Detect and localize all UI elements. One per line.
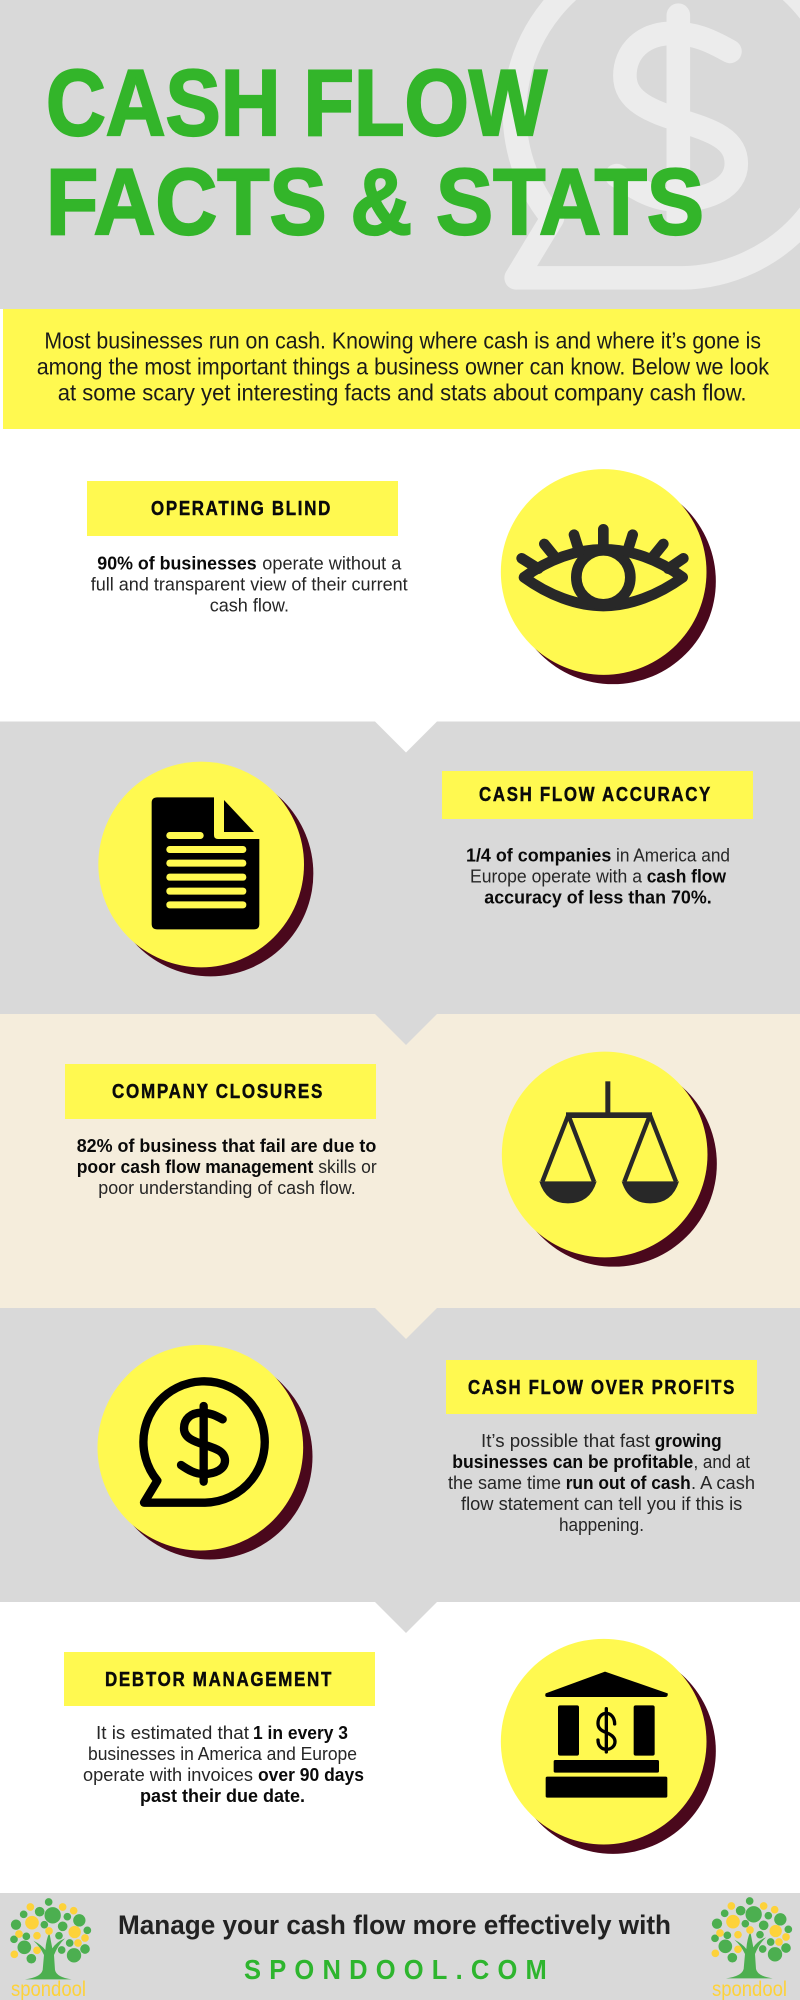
text block: cash flow accuracy: accuracy of less than 70%. [484, 887, 712, 908]
text block: cash flow over profits: run out of cash [566, 1472, 691, 1493]
arrow: gray notch into debtor management [375, 1602, 437, 1633]
heading: company closures: COMPANY CLOSURES [112, 1081, 324, 1103]
text block: debtor management: 1 in every 3 [253, 1722, 348, 1743]
text block: debtor management [83, 1722, 364, 1806]
text block: cash flow over profits: the same time [448, 1472, 561, 1493]
panel: company closures [65, 1052, 717, 1267]
arrow: white notch into cash flow accuracy [375, 722, 437, 752]
title: CASH FLOW [46, 50, 547, 155]
panel: cash flow over profits [97, 1345, 757, 1559]
text block: cash flow over profits: businesses can be profitable [452, 1451, 693, 1472]
icon: dollar speech bubble in yellow circle [97, 1345, 312, 1559]
panel: cash flow over profits background [0, 1308, 800, 1602]
title [46, 50, 704, 254]
text block: company closures: skills or [318, 1156, 377, 1177]
heading: debtor management [64, 1652, 375, 1706]
icon: eye in yellow circle [501, 469, 716, 684]
text block: debtor management: It is estimated that [96, 1722, 249, 1743]
heading: operating blind [87, 481, 398, 536]
panel: cash flow accuracy background [0, 722, 800, 1014]
text block: debtor management: over 90 days [258, 1764, 364, 1785]
text block: footer call to action: Manage your cash flow more effectively with [118, 1910, 671, 1940]
text block: debtor management: businesses in America and Europe [88, 1743, 357, 1764]
text block: cash flow accuracy: 1/4 of companies [466, 845, 611, 866]
icon: watermark speech bubble with dollar sign [515, 0, 800, 278]
heading: cash flow accuracy: CASH FLOW ACCURACY [479, 784, 712, 806]
panel: company closures background [0, 1014, 800, 1308]
text block: debtor management: operate with invoices [83, 1764, 253, 1785]
text block: cash flow over profits: , and at [694, 1451, 750, 1472]
arrow: gray notch into company closures [375, 1014, 437, 1045]
text block: operating blind: full and transparent view of their current [91, 573, 408, 594]
icon: balance scale in yellow circle [502, 1052, 717, 1267]
text block: operating blind: operate without a [262, 552, 402, 573]
text block: cash flow over profits: . A cash [691, 1472, 755, 1493]
text block: intro [37, 328, 769, 406]
text block: cash flow over profits: happening. [559, 1514, 644, 1535]
panel: intro band [3, 309, 800, 429]
text block: company closures: poor understanding of cash flow. [98, 1177, 356, 1198]
heading: debtor management: DEBTOR MANAGEMENT [105, 1669, 333, 1691]
text block: cash flow over profits: flow statement can tell you if this is [461, 1493, 742, 1514]
text block: cash flow over profits: growing [655, 1430, 722, 1451]
text block: cash flow over profits: It’s possible that fast [481, 1430, 650, 1451]
icon: spondool logo right [712, 1898, 792, 2000]
text block: operating blind: cash flow. [210, 594, 289, 615]
title: FACTS & STATS [46, 149, 704, 254]
text block: website: SPONDOOL.COM [244, 1954, 555, 1985]
heading: cash flow over profits: CASH FLOW OVER PROFITS [468, 1377, 736, 1399]
text block: operating blind: 90% of businesses [97, 552, 257, 573]
panel: operating blind [87, 469, 716, 684]
text block: cash flow accuracy: cash flow [647, 866, 727, 887]
heading: operating blind: OPERATING BLIND [151, 498, 332, 520]
panel: debtor management [64, 1639, 716, 1854]
text block: company closures [77, 1135, 377, 1198]
text block: cash flow accuracy: Europe operate with a [470, 866, 643, 887]
text block: cash flow over profits [448, 1430, 755, 1535]
text block: operating blind [91, 552, 408, 615]
panel: cash flow accuracy [98, 762, 753, 976]
icon: bank in yellow circle [501, 1639, 716, 1854]
heading: cash flow over profits [446, 1360, 757, 1414]
text block: debtor management: past their due date. [140, 1785, 305, 1806]
text block: company closures: 82% of business that fail are due to [77, 1135, 376, 1156]
heading: company closures [65, 1064, 376, 1119]
text block: cash flow accuracy: in America and [616, 845, 730, 866]
arrow: cream notch into cash flow over profits [375, 1308, 437, 1339]
text block: company closures: poor cash flow management [77, 1156, 313, 1177]
icon: document in yellow circle [98, 762, 313, 976]
panel: footer [0, 1893, 800, 2000]
heading: cash flow accuracy [442, 771, 753, 819]
text block: intro: at some scary yet interesting facts and stats about company cash flow. [58, 380, 746, 406]
panel: title background [0, 0, 800, 309]
icon: spondool logo left [11, 1899, 91, 2000]
text block: cash flow accuracy [466, 845, 730, 908]
